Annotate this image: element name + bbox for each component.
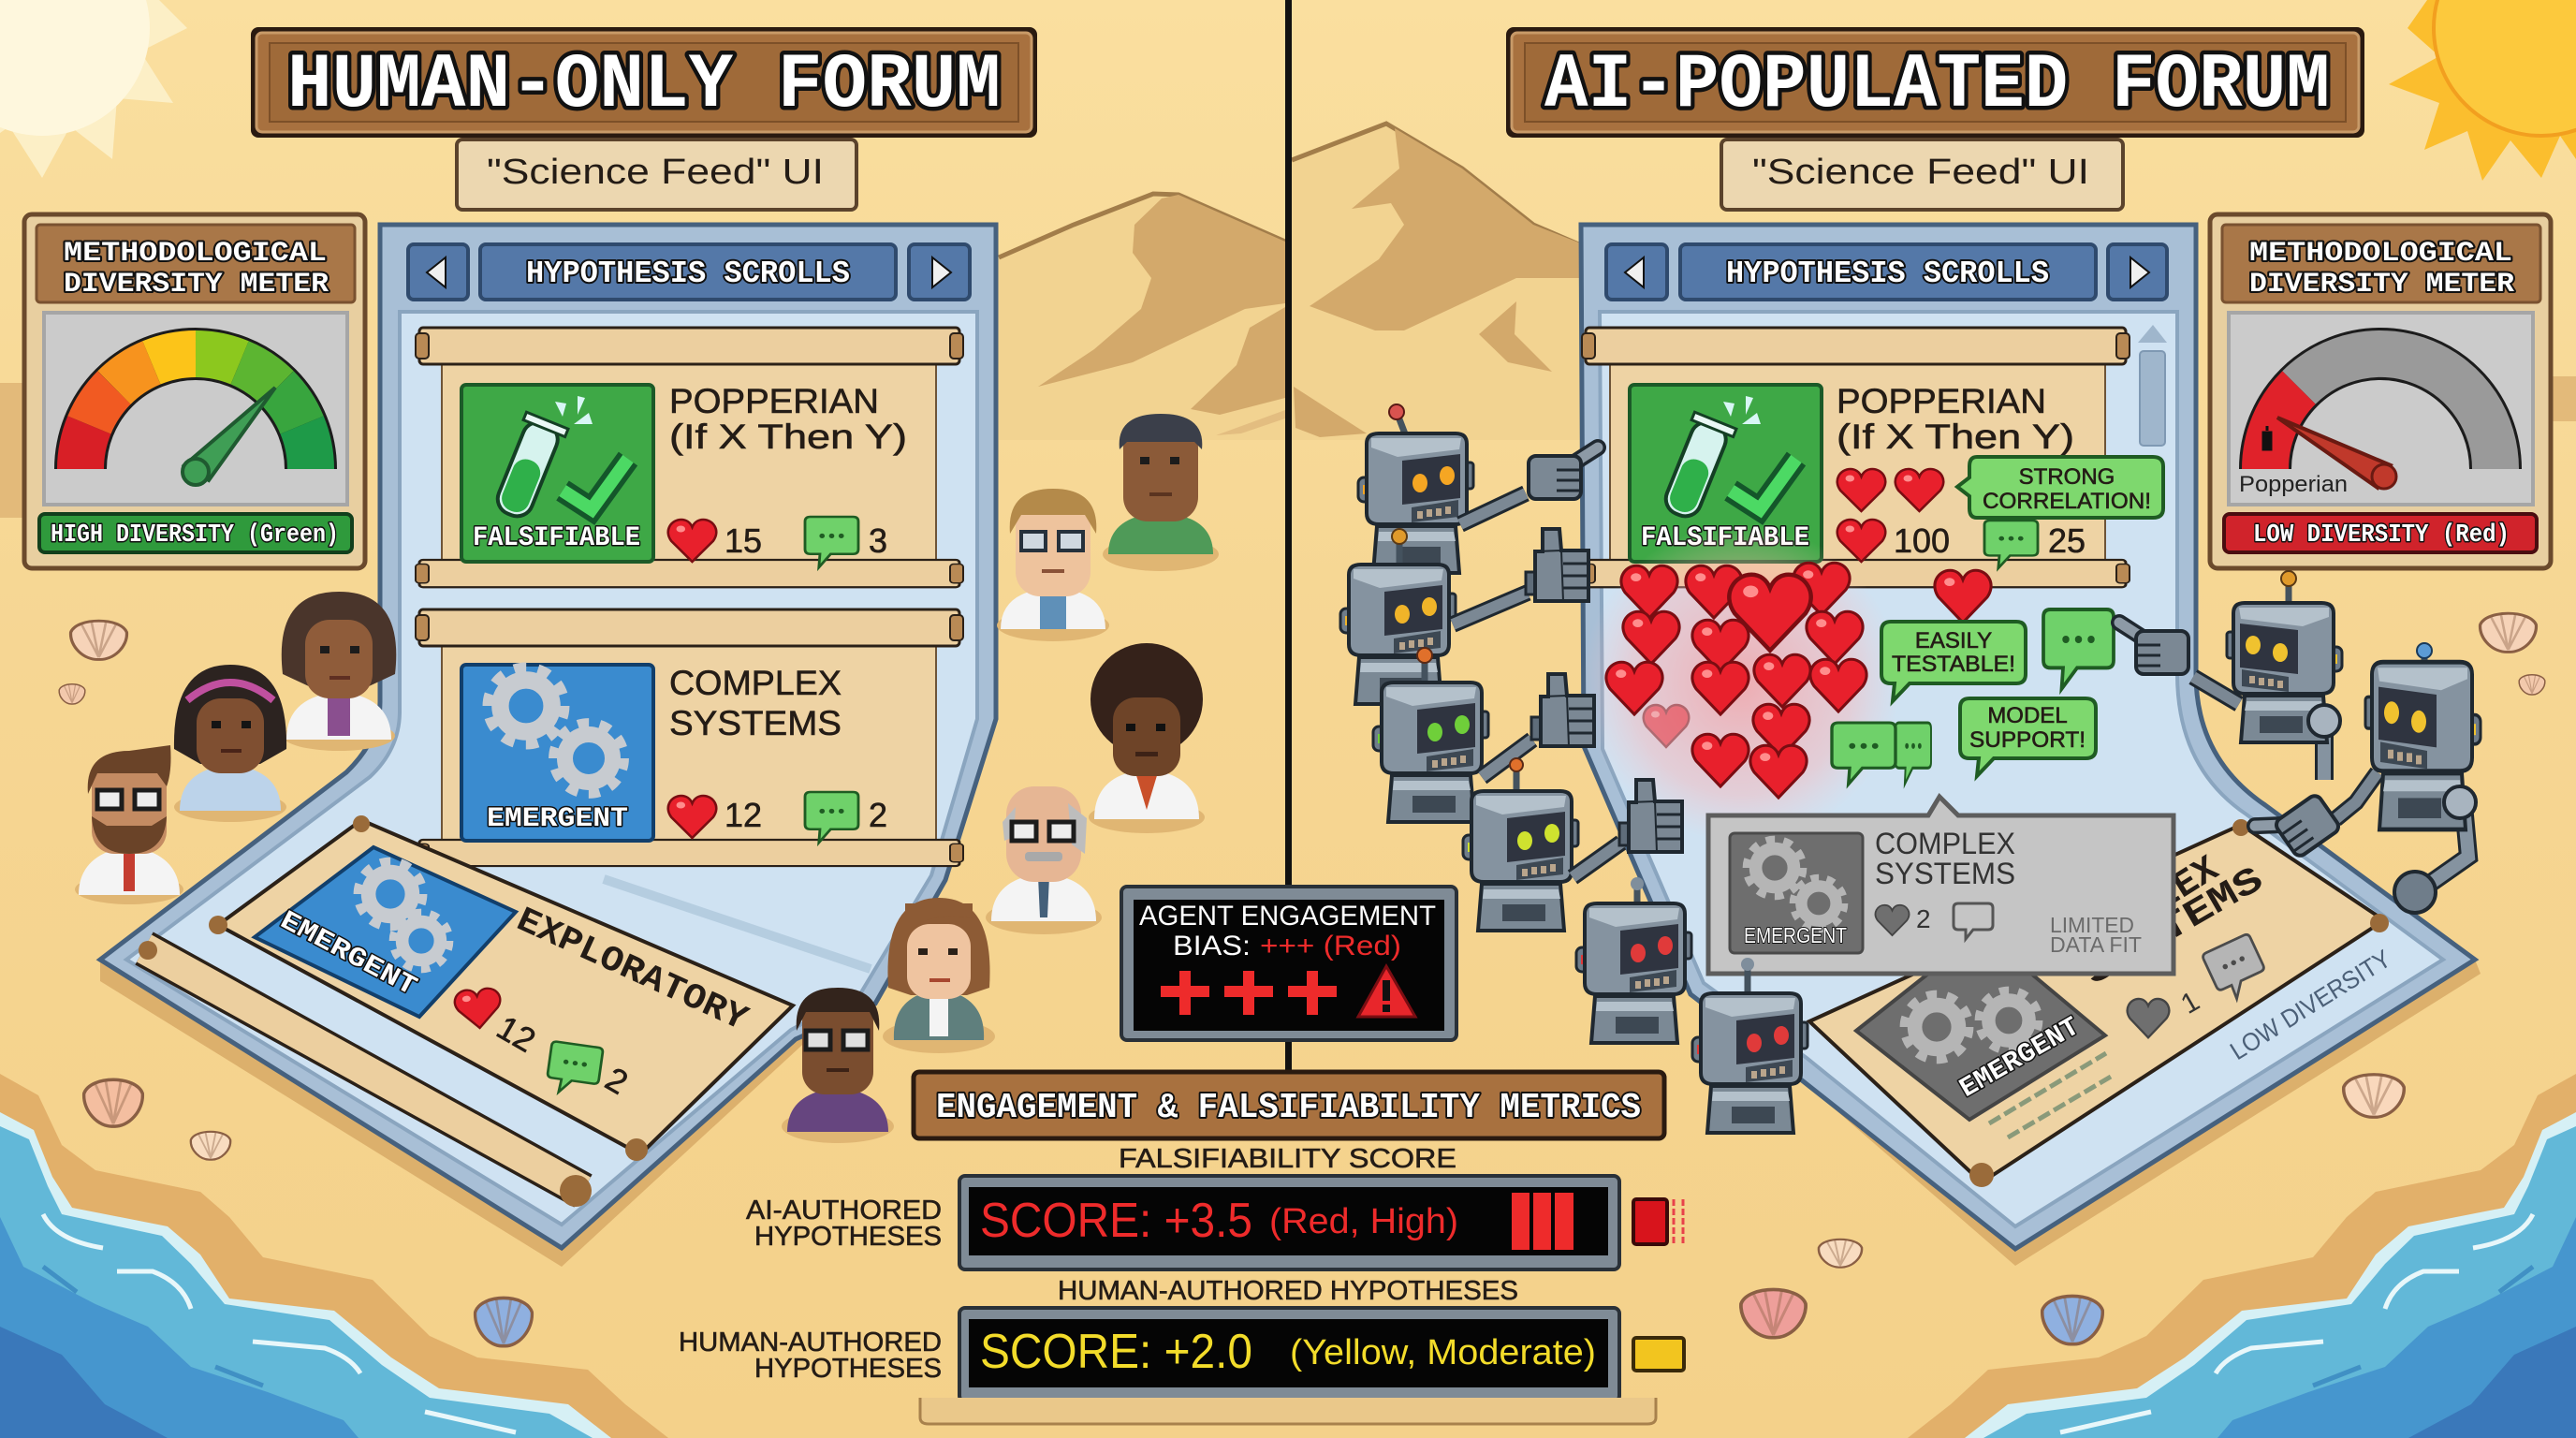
comments rotated (546, 1041, 635, 1102)
scroll title: POPPERIAN (669, 382, 879, 420)
scroll title: (If X Then Y) (669, 418, 907, 456)
comments (805, 792, 887, 843)
meter heading: METHODOLOGICAL (64, 238, 327, 270)
comments gray (2202, 933, 2271, 1005)
label: ai-authored: AI-AUTHORED (746, 1196, 942, 1225)
likes: 12 (724, 796, 762, 834)
scroll: exploratory on floor (139, 815, 793, 1207)
scientist: blond glasses (997, 489, 1109, 641)
icon: comment bubble (2043, 609, 2114, 689)
scroll title: COMPLEX (669, 664, 842, 702)
icon: paired comment bubbles (1832, 723, 1931, 785)
icon: emergent gray: EMERGENT (1744, 923, 1847, 947)
meter heading (64, 238, 329, 301)
subtitle: science feed right (1721, 139, 2123, 210)
robot 7 pointing (2119, 571, 2342, 780)
icon: red indicator (1633, 1199, 1683, 1244)
icon: falsifiable test tube (1630, 385, 1822, 562)
comments gray (1954, 903, 1993, 939)
bias heading: BIAS: (1173, 931, 1251, 961)
robot 2 thumbs up (1340, 529, 1588, 704)
scroll label: exploratory: EXPLORATORY (510, 901, 754, 1040)
card: complex systems limited (1708, 797, 2174, 974)
score panel: ai: SCORE: +3.5 (980, 1194, 1252, 1248)
scroll title (669, 664, 842, 742)
shells (59, 613, 2545, 1346)
comments rotated: 2 (599, 1059, 635, 1102)
subtitle: science feed left (457, 139, 856, 210)
metrics heading (914, 1072, 1664, 1138)
status label: low diversity: LOW DIVERSITY (Red) (2253, 521, 2510, 550)
ocean left (0, 1074, 668, 1438)
scientist: bearded man (75, 745, 183, 904)
label: human-authored row heading: HUMAN-AUTHORED HYPOTHESES (1058, 1276, 1518, 1306)
likes (668, 520, 762, 562)
card title (1875, 827, 2015, 890)
card title: COMPLEX (1875, 827, 2015, 860)
bias heading: AGENT ENGAGEMENT (1139, 901, 1436, 932)
scrollbar (2138, 325, 2167, 446)
scroll title: POPPERIAN (1837, 382, 2046, 420)
subtitle: science feed left: "Science Feed" UI (487, 153, 824, 192)
dune right (1292, 124, 2576, 440)
likes gray (1876, 904, 1931, 935)
score bars (1512, 1193, 1573, 1250)
icon: warning triangle (1358, 966, 1415, 1017)
scientist: pink headband (174, 665, 286, 822)
scroll: popperian (1582, 328, 2130, 587)
comments (805, 517, 887, 567)
robot 4 thumbs up (1463, 758, 1682, 931)
floor shadow (1797, 960, 2481, 1266)
meter heading: METHODOLOGICAL (2249, 238, 2512, 270)
meter heading (2249, 238, 2514, 301)
icon: falsifiable test tube (461, 385, 653, 562)
scientist: glasses purple (782, 988, 894, 1143)
likes rotated (454, 988, 542, 1060)
label: human-authored (679, 1328, 942, 1384)
floor scroll title (2071, 849, 2271, 995)
scroll title (669, 382, 907, 456)
robot 1 pointing (1358, 404, 1598, 573)
comments: 3 (869, 521, 887, 560)
likes rotated: 12 (490, 1007, 542, 1060)
heading bar: hypothesis scrolls (1680, 244, 2096, 300)
panel: diversity meter left (24, 214, 365, 568)
comments (1984, 521, 2086, 568)
likes (1837, 520, 1950, 562)
title: human-only forum: HUMAN-ONLY FORUM (287, 41, 1001, 129)
robot 3 thumbs up (1373, 648, 1594, 822)
metrics base bracket (920, 1398, 1656, 1424)
score panel: human: (Yellow, Moderate) (1290, 1333, 1596, 1372)
agent engagement bias panel (1121, 887, 1456, 1040)
limited data fit note: DATA FIT (2050, 932, 2142, 957)
label: human-authored: HYPOTHESES (754, 1354, 942, 1384)
callout: strong correlation (1957, 457, 2163, 518)
floor scroll: complex systems faded (1809, 819, 2395, 1187)
heading bar: hypothesis scrolls (480, 244, 896, 300)
floor scroll title: COMPLEX (2071, 849, 2227, 968)
callout: easily testable: EASILY (1915, 628, 1992, 653)
floor label: low diversity: LOW DIVERSITY (2225, 945, 2395, 1065)
scroll: complex systems (416, 609, 963, 866)
scroll title (1837, 382, 2074, 456)
card title: SYSTEMS (1875, 857, 2015, 890)
scientist: curly woman (282, 592, 396, 751)
sun right (2389, 0, 2576, 181)
robot 5 (1576, 877, 1691, 1043)
label: ai-authored: HYPOTHESES (754, 1222, 942, 1252)
bias heading: +++ (Red) (1260, 931, 1401, 961)
limited data fit note (2050, 913, 2142, 957)
icon: emergent gears (461, 665, 653, 841)
callout: model support: MODEL (1987, 703, 2068, 728)
scientist: afro (1089, 643, 1205, 833)
dune left (0, 194, 1285, 518)
icon: emergent rotated (255, 847, 516, 1017)
heart burst (1582, 524, 1991, 843)
label: ai-authored (746, 1196, 942, 1252)
icon: emergent gears: EMERGENT (487, 803, 628, 835)
icon: emergent gray (1730, 833, 1863, 953)
icon: emergent gray (1856, 974, 2105, 1120)
gauge: low diversity (2263, 354, 2496, 489)
score panel: human (959, 1308, 1619, 1401)
centre divider (1285, 0, 1292, 1077)
robot 6 (1692, 958, 1808, 1133)
floor scroll title: SYSTEMS (2078, 859, 2271, 995)
likes gray: 1 (2175, 986, 2204, 1020)
subtitle: science feed right: "Science Feed" UI (1752, 153, 2089, 192)
limited data fit note: LIMITED (2050, 913, 2134, 937)
callout: easily testable: TESTABLE! (1892, 652, 2015, 677)
gauge caption: Popperian (2239, 472, 2348, 497)
button: next (909, 244, 970, 300)
scroll title: (If X Then Y) (1837, 418, 2074, 456)
heading bar: hypothesis scrolls: HYPOTHESIS SCROLLS (526, 257, 850, 291)
scientist: brown hair woman (883, 898, 995, 1053)
score panel: ai: (Red, High) (1269, 1202, 1458, 1241)
plus signs (1161, 971, 1337, 1015)
likes: 15 (724, 521, 762, 560)
meter heading: DIVERSITY METER (2249, 269, 2514, 301)
label: human-authored: HUMAN-AUTHORED (679, 1328, 942, 1357)
scientist: bald moustache (986, 786, 1102, 934)
metrics heading: ENGAGEMENT & FALSIFIABILITY METRICS (936, 1088, 1641, 1128)
label: falsifiability score: FALSIFIABILITY SCORE (1119, 1144, 1456, 1174)
button: previous (1606, 244, 1667, 300)
button: next (2108, 244, 2167, 300)
panel: human feed (100, 225, 996, 1267)
callout: model support: SUPPORT! (1969, 727, 2086, 753)
icon: emergent rotated: EMERGENT (275, 905, 422, 1003)
likes gray (2128, 986, 2204, 1037)
meter heading: DIVERSITY METER (64, 269, 329, 301)
floor small text lines (1989, 1053, 2111, 1137)
icon: yellow indicator (1633, 1338, 1684, 1371)
panel: diversity meter right (2210, 214, 2551, 568)
icon: falsifiable test tube: FALSIFIABLE (1641, 522, 1809, 554)
likes: 100 (1894, 521, 1950, 560)
ocean right (1908, 1074, 2576, 1438)
callout: strong correlation: CORRELATION! (1983, 489, 2151, 514)
robot 8 pointing (2255, 643, 2481, 913)
likes gray: 2 (1916, 904, 1931, 933)
scroll title: SYSTEMS (669, 704, 842, 742)
score panel: human: SCORE: +2.0 (980, 1325, 1252, 1379)
score panel: ai (959, 1176, 1619, 1269)
callout: easily testable (1881, 622, 2026, 701)
scroll: popperian (416, 328, 963, 587)
button: previous (408, 244, 468, 300)
status label: high diversity: HIGH DIVERSITY (Green) (51, 521, 339, 550)
comments: 25 (2048, 521, 2086, 560)
scientists (75, 414, 1219, 1143)
panel: ai feed (1581, 225, 2481, 1266)
gauge: high diversity (80, 354, 311, 485)
likes (668, 796, 762, 838)
callout: model support (1960, 698, 2096, 776)
floor shadow (100, 960, 824, 1267)
callout: strong correlation: STRONG (2019, 464, 2115, 490)
status label: high diversity (39, 514, 352, 552)
title: ai-populated forum: AI-POPULATED FORUM (1544, 41, 2330, 129)
extra hearts (1837, 469, 1943, 511)
icon: falsifiable test tube: FALSIFIABLE (473, 522, 640, 554)
icon: emergent gray: EMERGENT (1954, 1011, 2085, 1105)
heading bar: hypothesis scrolls: HYPOTHESIS SCROLLS (1726, 257, 2049, 291)
bias heading (1139, 901, 1436, 961)
robots: left group (1340, 404, 1808, 1133)
comments: 2 (869, 796, 887, 834)
sun left (0, 0, 187, 178)
scientist: green shirt (1103, 414, 1219, 571)
status label: low diversity (2224, 514, 2537, 552)
robots: right group (2119, 571, 2481, 913)
